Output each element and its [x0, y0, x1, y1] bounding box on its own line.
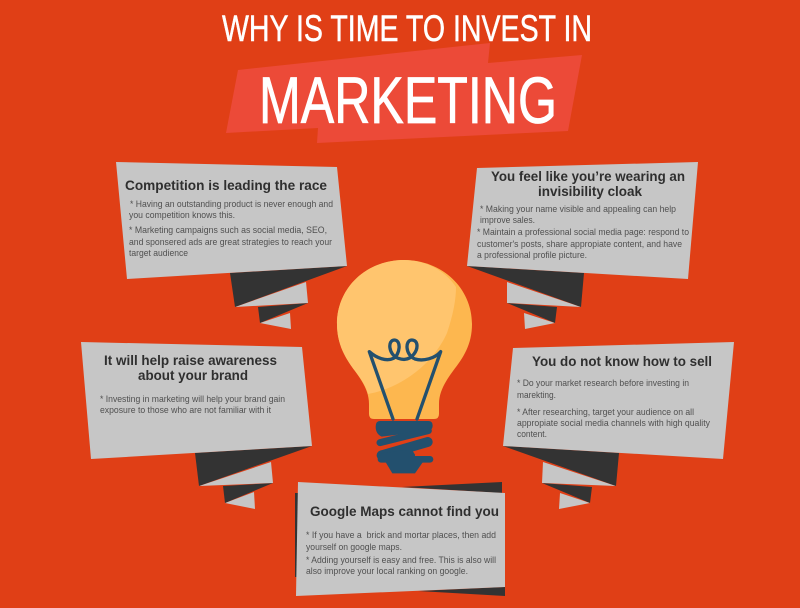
text: invisibility body: customer's posts, share appropiate content, and have	[477, 239, 682, 249]
text: competition body	[129, 199, 333, 258]
text: competition body: and sponsered ads are great strategies to reach your	[129, 237, 332, 247]
panel: invisibility cloak	[467, 162, 698, 329]
text: how to sell body: * Do your market research before investing in	[517, 378, 689, 388]
text: how to sell body: marekting.	[517, 390, 556, 400]
heading: google maps: Google Maps cannot find you	[310, 503, 499, 519]
text: invisibility body	[477, 204, 689, 260]
text: competition body: * Marketing campaigns such as social media, SEO,	[129, 225, 327, 235]
panel: competition	[116, 162, 347, 329]
text: competition body: target audience	[129, 248, 188, 258]
text: google maps body: also improve your local ranking on google.	[306, 566, 468, 576]
heading: invisibility cloak	[491, 168, 685, 199]
title line: WHY IS TIME TO INVEST IN	[222, 8, 592, 49]
text: how to sell body	[517, 378, 710, 439]
heading: how to sell: You do not know how to sell	[532, 353, 712, 369]
heading: invisibility cloak: You feel like you’re wearing an	[491, 168, 685, 184]
text: brand awareness body	[100, 394, 285, 415]
heading: brand awareness: about your brand	[138, 367, 248, 383]
heading: competition: Competition is leading the race	[125, 177, 327, 193]
bulb screw base	[376, 421, 433, 473]
text: invisibility body: a professional profile picture.	[477, 250, 587, 260]
text: brand awareness body: * Investing in marketing will help your brand gain	[100, 394, 285, 404]
text: how to sell body: content.	[517, 429, 547, 439]
text: google maps body: yourself on google maps.	[306, 542, 402, 552]
text: google maps body: * If you have a brick and mortar places, then add	[306, 530, 496, 540]
text: brand awareness body: exposure to those who are not familiar with it	[100, 405, 271, 415]
text: invisibility body: * Making your name visible and appealing can help	[480, 204, 676, 214]
text: invisibility body: * Maintain a professional social media page: respond to	[477, 227, 689, 237]
text: google maps body: * Adding yourself is easy and free. This is also will	[306, 555, 496, 565]
title banner	[226, 43, 582, 143]
heading: invisibility cloak: invisibility cloak	[538, 183, 642, 199]
heading: brand awareness: It will help raise awareness	[104, 352, 277, 368]
icon: light bulb	[337, 260, 472, 473]
panel: how to sell	[503, 342, 734, 509]
text: google maps body	[306, 530, 496, 576]
bulb filament	[369, 340, 441, 419]
panel: brand awareness	[81, 342, 312, 509]
text: how to sell body: appropiate social media channels with high quality	[517, 418, 710, 428]
heading: brand awareness	[104, 352, 277, 383]
text: how to sell body: * After researching, target your audience on all	[517, 407, 694, 417]
text: competition body: * Having an outstanding product is never enough and	[130, 199, 333, 209]
panel: google maps	[295, 482, 505, 596]
text: competition body: you competition knows this.	[129, 210, 235, 220]
text: invisibility body: improve sales.	[480, 215, 535, 225]
banner word: MARKETING	[259, 63, 557, 137]
